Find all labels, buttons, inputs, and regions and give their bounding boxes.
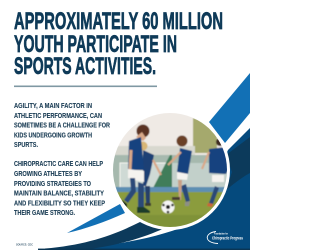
text block: agility: SOMETIMES BE A CHALLENGE FOR: [14, 120, 111, 130]
source note: SOURCE: CDC: [16, 242, 34, 246]
text block: chiropractic care: MAINTAIN BALANCE, STABILITY: [14, 188, 104, 198]
text block: chiropractic care: PROVIDING STRATEGIES TO: [14, 179, 91, 188]
text block: chiropractic care: GROWING ATHLETES BY: [14, 169, 82, 178]
title: [14, 8, 223, 80]
right swoosh: dark navy: [226, 137, 250, 190]
text block: agility: SPURTS.: [14, 140, 38, 149]
player 1: [122, 124, 150, 213]
title: SPORTS ACTIVITIES.: [14, 53, 156, 80]
bottom swoosh: mid blue: [40, 128, 250, 250]
text block: chiropractic care: THEIR GAME STRONG.: [14, 208, 75, 217]
soccer ball: [162, 200, 174, 214]
bottom swoosh: dark navy: [45, 222, 165, 250]
text block: agility: AGILITY, A MAIN FACTOR IN: [14, 101, 92, 110]
bottom edge line: [38, 249, 250, 250]
text block: agility: KIDS UNDERGOING GROWTH: [14, 130, 92, 140]
blue accent: lower left: [67, 204, 125, 233]
photo: soccer players: [113, 113, 227, 227]
text block: chiropractic care: AND FLEXIBILITY SO THEY KEEP: [14, 198, 105, 208]
text block: agility: ATHLETIC PERFORMANCE, CAN: [14, 111, 102, 120]
player 2: [138, 142, 161, 206]
blue accent: upper right: [209, 73, 250, 143]
logo: [207, 232, 243, 244]
text block: chiropractic care: [14, 159, 105, 217]
photo ring: [110, 110, 230, 230]
text block: agility: [14, 101, 111, 149]
background: [0, 0, 250, 250]
player 4: [202, 138, 228, 207]
player 3: [168, 136, 192, 206]
logo: Foundation for: [214, 232, 229, 236]
text block: chiropractic care: CHIROPRACTIC CARE CAN HELP: [14, 159, 103, 168]
